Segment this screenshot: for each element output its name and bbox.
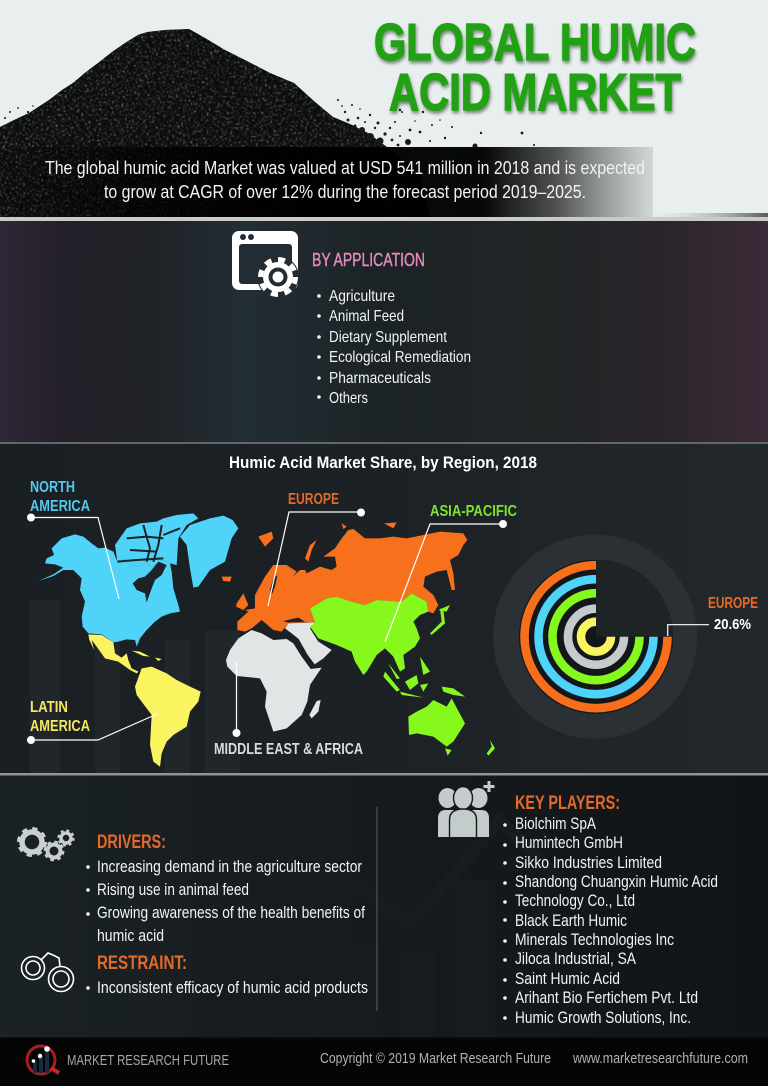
heading: drivers: DRIVERS: [97, 832, 166, 853]
heading: key players: KEY PLAYERS: [515, 793, 620, 814]
intro text: to grow at CAGR of over 12% during the forecast period 2019–2025. [104, 181, 586, 202]
Africa and Middle East [226, 622, 332, 732]
intro text: The global humic acid Market was valued at USD 541 million in 2018 and is expected [45, 157, 645, 178]
icon: market research future logo [27, 1046, 59, 1074]
application list: Agriculture [329, 288, 395, 305]
Latin America [88, 634, 201, 767]
icon: gears [18, 828, 74, 860]
coal pile image [0, 29, 535, 218]
label: latin america [30, 699, 90, 735]
brand name: MARKET RESEARCH FUTURE [67, 1053, 229, 1069]
icon: handcuffs [22, 953, 74, 992]
restraint list: Inconsistent efficacy of humic acid products [97, 979, 368, 997]
label: latin america: AMERICA [30, 718, 90, 735]
key players list: Humic Growth Solutions, Inc. [515, 1009, 691, 1027]
key players list: Saint Humic Acid [515, 970, 620, 988]
heading: by application: BY APPLICATION [312, 250, 425, 270]
drivers list: Growing awareness of the health benefits of [97, 904, 365, 922]
heading: restraint: RESTRAINT: [97, 953, 187, 974]
panel: drivers, restraint and key players [0, 776, 768, 1038]
application list: Pharmaceuticals [329, 370, 431, 387]
title [374, 14, 696, 122]
icon: people [438, 781, 494, 837]
Arctic channels [117, 525, 180, 562]
drivers list: Increasing demand in the agriculture sector [97, 858, 362, 876]
application list: Ecological Remediation [329, 349, 471, 366]
key players list: Black Earth Humic [515, 912, 627, 930]
key players list: Biolchim SpA [515, 815, 596, 833]
icon: window with gear [232, 231, 299, 298]
label: asia-pacific: ASIA-PACIFIC [430, 503, 517, 520]
application list: Others [329, 390, 368, 407]
application list: Dietary Supplement [329, 329, 447, 346]
label: latin america: LATIN [30, 699, 68, 716]
key players list: Sikko Industries Limited [515, 854, 662, 872]
radial bar chart [493, 535, 697, 739]
footer [0, 1038, 768, 1086]
label: middle east and africa: MIDDLE EAST & AFRICA [214, 741, 363, 758]
key players list: Jiloca Industrial, SA [515, 950, 636, 968]
intro text [45, 157, 645, 202]
label: north america: NORTH [30, 479, 75, 496]
key players list: Minerals Technologies Inc [515, 931, 674, 949]
title: GLOBAL HUMIC [374, 14, 696, 72]
leader lines [31, 512, 503, 740]
key players list: Humintech GmbH [515, 834, 623, 852]
panel: market share by region [0, 444, 768, 776]
Baltic and Black Sea [270, 575, 305, 623]
chart heading: Humic Acid Market Share, by Region, 2018 [229, 454, 537, 472]
chart callout: europe share [668, 595, 758, 636]
chart callout: europe share: 20.6% [714, 617, 751, 633]
title: ACID MARKET [389, 64, 681, 122]
North America [38, 513, 238, 647]
header panel [0, 0, 768, 218]
panel: by application [0, 217, 768, 444]
Hudson Bay [133, 562, 167, 602]
label: europe: EUROPE [288, 491, 339, 508]
world map: americas [38, 513, 238, 767]
key players list: Technology Co., Ltd [515, 892, 635, 910]
label: north america [30, 479, 90, 515]
application list [317, 288, 471, 407]
key players list [503, 815, 718, 1027]
copyright: Copyright © 2019 Market Research Future [320, 1051, 551, 1067]
leader dots [27, 508, 507, 744]
world map: eurasia, africa and oceania [222, 522, 495, 756]
drivers list: Rising use in animal feed [97, 881, 249, 899]
Europe and Russia [222, 522, 467, 632]
label: north america: AMERICA [30, 498, 90, 515]
application list: Animal Feed [329, 308, 404, 325]
key players list: Shandong Chuangxin Humic Acid [515, 873, 718, 891]
drivers list [86, 858, 365, 945]
drivers list: humic acid [97, 927, 164, 945]
Asia-Pacific [310, 593, 495, 756]
dark strip behind the intro [0, 147, 653, 217]
key players list: Arihant Bio Fertichem Pvt. Ltd [515, 989, 698, 1007]
